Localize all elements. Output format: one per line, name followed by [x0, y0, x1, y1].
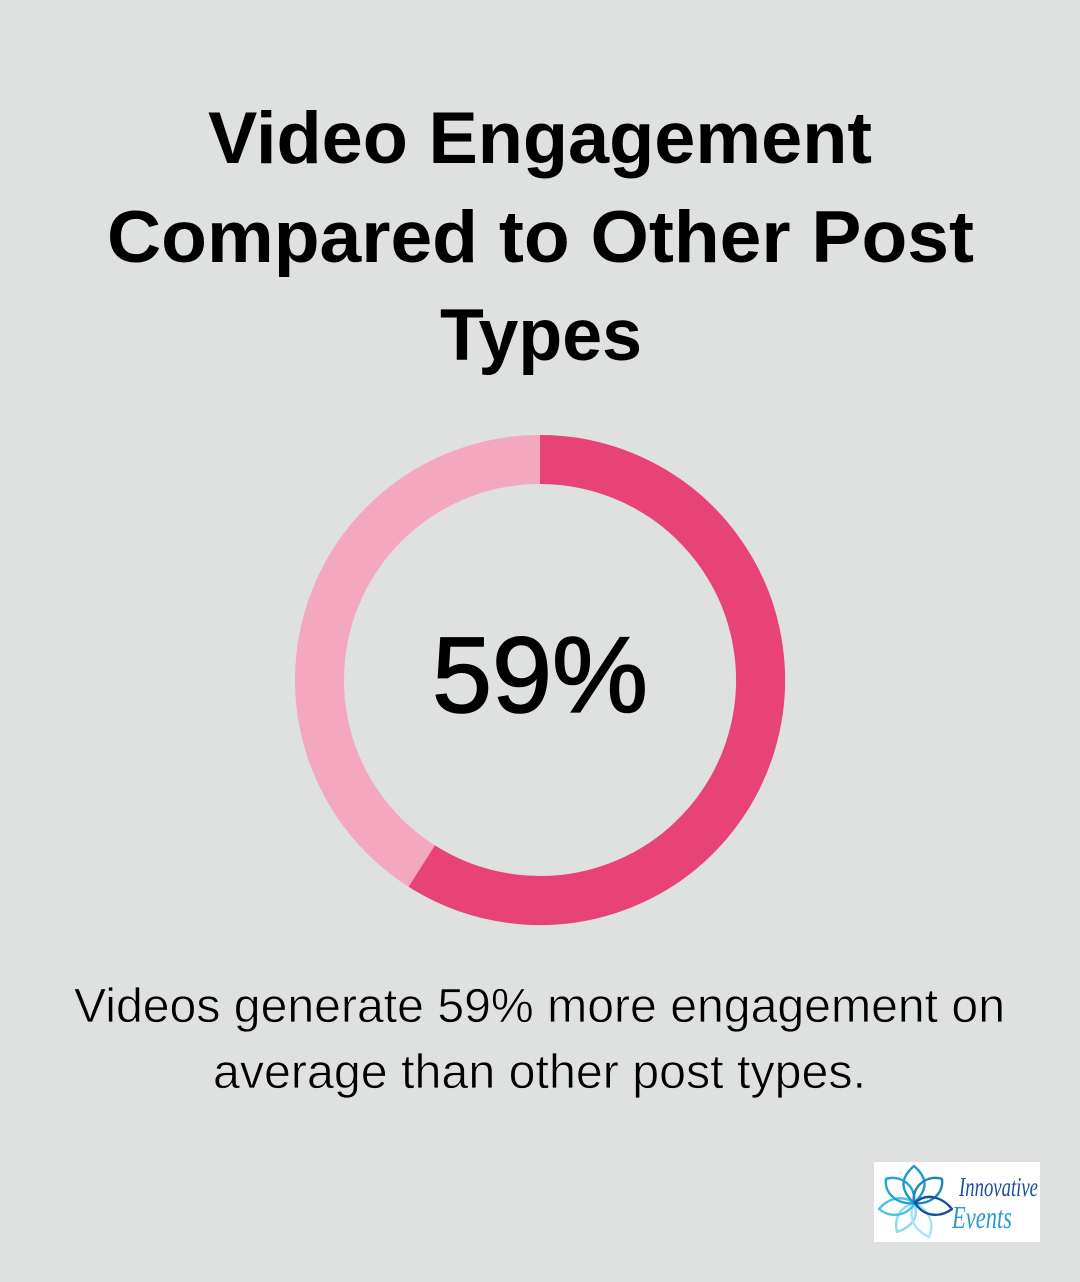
donut chart: 59%	[320, 460, 761, 900]
donut segment: 59%	[422, 460, 761, 900]
donut track: remainder	[320, 460, 760, 900]
description text: Videos generate 59% more engagement on	[74, 980, 1005, 1033]
logo wordmark: Innovative	[958, 1172, 1038, 1202]
title: Types	[440, 295, 642, 376]
description text: average than other post types.	[213, 1046, 866, 1099]
logo: Innovative Events: Events	[951, 1199, 1012, 1235]
logo: Innovative Events	[874, 1162, 1040, 1242]
title: Video Engagement	[208, 98, 872, 179]
title	[107, 98, 974, 376]
description text	[74, 980, 1005, 1099]
center value: 59%	[432, 614, 648, 735]
icon: flower	[879, 1166, 952, 1237]
title: Compared to Other Post	[107, 197, 974, 278]
